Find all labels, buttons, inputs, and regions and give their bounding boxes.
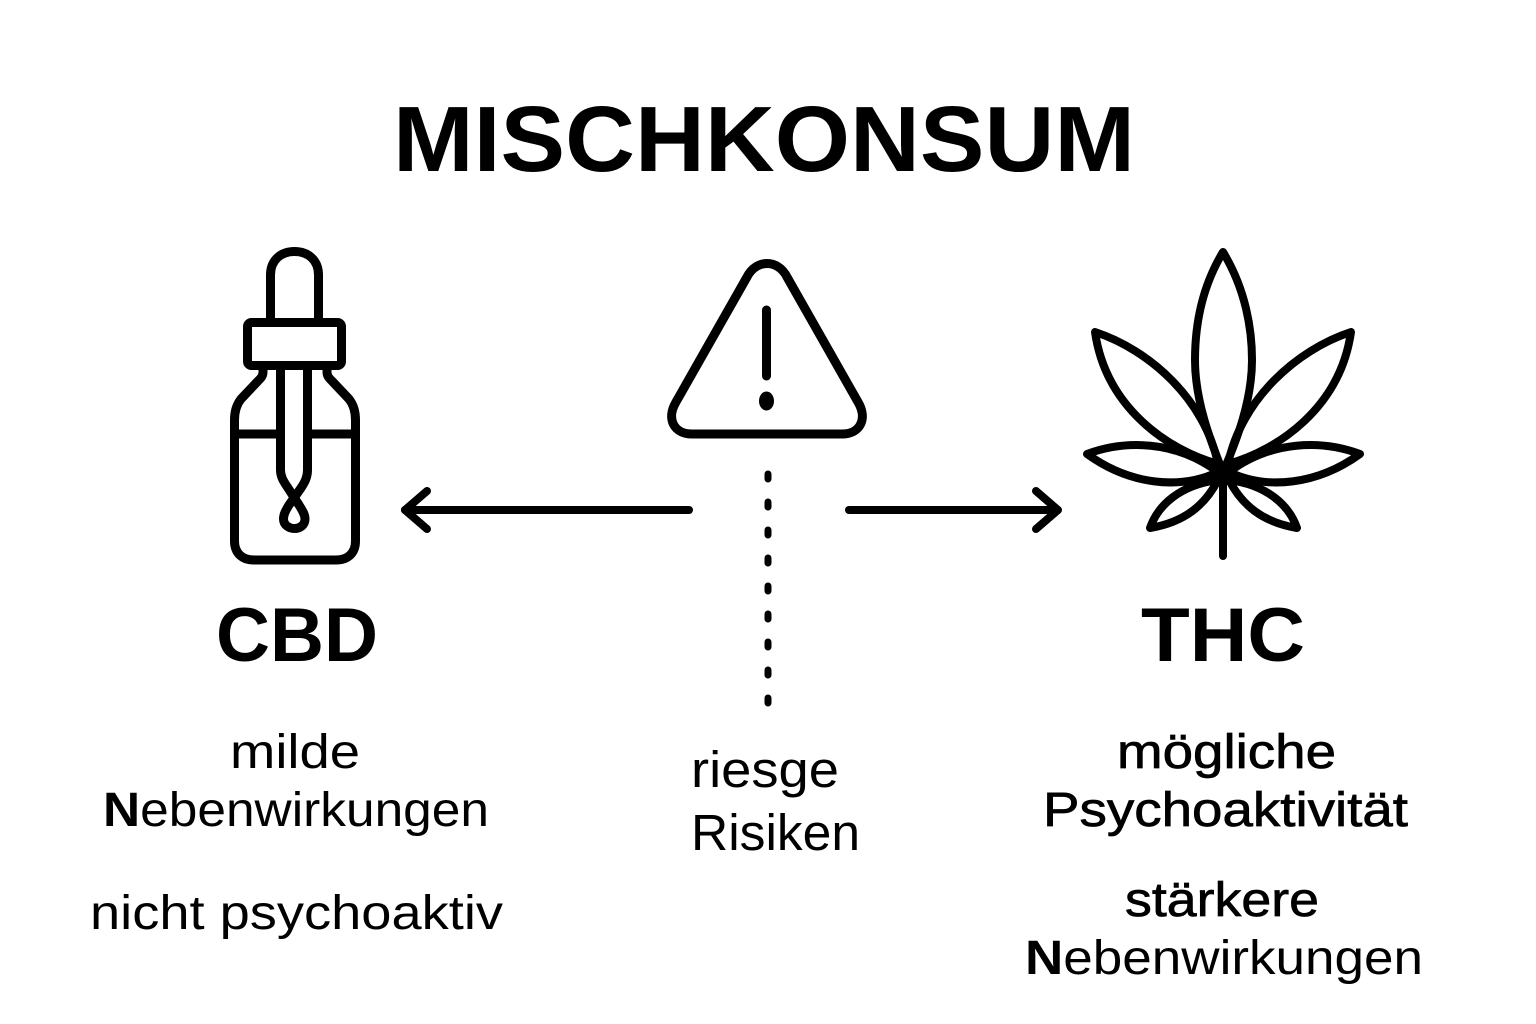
heading: CBD: CBD xyxy=(216,593,378,678)
text: CBD effects: milde xyxy=(230,726,360,779)
text: THC effects: mögliche xyxy=(1117,726,1336,779)
text: THC effects xyxy=(1025,726,1423,985)
text: THC effects: Psychoaktivität xyxy=(1043,784,1408,837)
text: THC effects: Nebenwirkungen xyxy=(1025,932,1423,985)
text: CBD effects xyxy=(90,726,503,940)
heading: THC: THC xyxy=(1141,593,1305,678)
arrow: to CBD xyxy=(405,491,689,529)
icon: CBD dropper bottle xyxy=(234,252,356,560)
text: CBD effects: nicht psychoaktiv xyxy=(90,887,503,940)
icon: warning triangle xyxy=(672,264,862,434)
icon: cannabis leaf xyxy=(1087,252,1360,556)
text: CBD effects: Nebenwirkungen xyxy=(103,784,489,837)
arrow: to THC xyxy=(849,491,1058,529)
text: center risks xyxy=(691,741,860,861)
text: THC effects: stärkere xyxy=(1125,874,1319,927)
text: center risks: riesge xyxy=(691,741,839,798)
text: center risks: Risiken xyxy=(691,804,860,861)
title: MISCHKONSUM xyxy=(393,87,1135,191)
dotted divider xyxy=(764,474,772,703)
